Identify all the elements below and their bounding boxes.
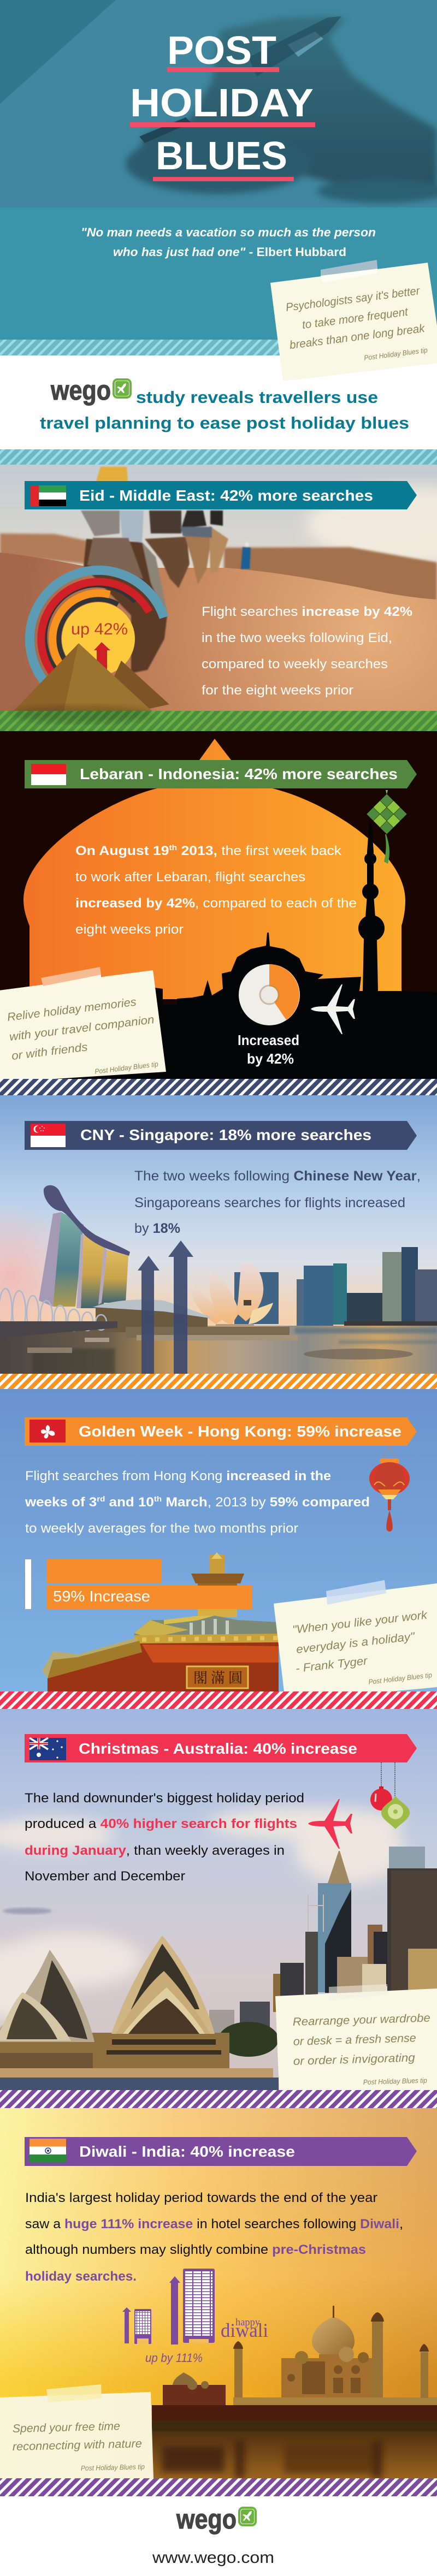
stripes: orange <box>0 1374 437 1389</box>
wego logo: wego <box>50 375 111 406</box>
Sydney Opera House <box>0 1936 279 2090</box>
note: wardrobe tip: or order is invigorating <box>293 2051 415 2068</box>
mosque building <box>163 2372 226 2407</box>
banner: Eid: Eid - Middle East: 42% more searches <box>79 487 373 504</box>
body text: Lebaran: to work after Lebaran, flight searches <box>75 870 305 885</box>
chart: pie 42%: Increased <box>238 1032 299 1048</box>
body text: Christmas: produced a 40% higher search for flights <box>25 1817 297 1831</box>
chart: arcs up 42% with pyramids <box>14 570 169 711</box>
note: Frank Tyger quote: everyday is a holiday" <box>296 1630 416 1656</box>
text: happy diwali: happy <box>235 2317 260 2328</box>
body text: Diwali <box>25 2191 403 2284</box>
body text: CNY: The two weeks following Chinese New Year , <box>134 1168 421 1184</box>
flag: Singapore <box>31 1124 66 1147</box>
note: psychologists tip: Psychologists say it's better <box>285 284 421 314</box>
Marina Bay Sands <box>39 1185 130 1308</box>
body text: Lebaran: th <box>169 843 177 852</box>
note: nature tip <box>0 2384 153 2478</box>
arrows: rising <box>138 1240 193 1374</box>
note: nature tip: Post Holiday Blues tip <box>81 2462 145 2472</box>
icon: ketupat <box>367 790 407 864</box>
bar chart: 59% increase <box>25 1559 252 1609</box>
chart: pie 42% <box>238 964 300 1067</box>
body text: Lebaran: On August 19 <box>75 843 217 858</box>
note: relive memories tip: or with friends <box>11 1041 88 1063</box>
panel: quote band <box>0 207 437 340</box>
note: nature tip: Spend your free time <box>13 2420 120 2435</box>
title: HOLIDAY <box>130 81 314 125</box>
Taj Mahal <box>233 2306 437 2405</box>
Sydney towers <box>209 1847 437 2057</box>
panel: Eid Middle East <box>0 465 437 711</box>
note: relive memories tip <box>0 967 166 1079</box>
panel: Diwali India <box>0 2108 437 2478</box>
body text: Diwali: holiday searches. <box>25 2269 137 2284</box>
body text: Christmas: The land downunder's biggest holiday period <box>25 1791 304 1806</box>
body text: CNY: by 18% <box>134 1221 180 1236</box>
stripes: purple lower <box>0 2478 437 2496</box>
note: Frank Tyger quote: Post Holiday Blues tip <box>368 1671 433 1686</box>
note: relive memories tip: Relive holiday memories <box>7 995 137 1024</box>
body text: Christmas: November and December <box>25 1869 185 1884</box>
website url: www.wego.com <box>152 2549 274 2567</box>
note: Frank Tyger quote: "When you like your work <box>292 1608 429 1636</box>
panel: hero header <box>0 0 437 207</box>
body text: Lebaran: the first week back <box>221 844 329 858</box>
banner: CNY: CNY - Singapore: 18% more searches <box>80 1126 371 1143</box>
title: BLUES <box>156 134 287 178</box>
banner: Golden Week <box>25 1417 417 1446</box>
shape: orange dome <box>23 739 405 999</box>
icon: white plane <box>311 984 355 1034</box>
note: relive memories tip: with your travel companion <box>9 1013 155 1043</box>
quote text: "No man needs a vacation so much as the person <box>81 225 376 239</box>
body text: CNY <box>134 1168 421 1236</box>
banner: Lebaran <box>25 760 417 788</box>
banner: Eid <box>25 481 417 509</box>
text: happy diwali: diwali <box>221 2319 268 2341</box>
note: wardrobe tip <box>275 1984 437 2090</box>
body text: Hong Kong: March <box>162 1495 208 1510</box>
body text: Hong Kong: weeks of 3 <box>25 1494 208 1510</box>
note: psychologists tip: breaks than one long break <box>289 322 426 352</box>
quote text <box>81 225 376 259</box>
body text: Diwali: saw a huge 111% increase in hotel searches following Diwali, <box>25 2217 403 2231</box>
body text: Lebaran: eight weeks prior <box>75 922 184 937</box>
photo: Marina Bay skyline <box>0 1095 437 1374</box>
icon: baubles <box>370 1762 410 1829</box>
stripes: teal lower <box>0 449 437 465</box>
flag: Hong Kong <box>29 1420 66 1443</box>
body text: CNY: Singaporeans searches for flights increased <box>134 1195 405 1210</box>
icon: lantern <box>369 1447 410 1532</box>
note: wardrobe tip: or desk = a fresh sense <box>293 2032 416 2048</box>
panel: CNY Singapore <box>0 1095 437 1374</box>
flag: India <box>29 2139 66 2162</box>
banner: Golden Week: Golden Week - Hong Kong: 59% increase <box>79 1423 401 1440</box>
note: psychologists tip: Post Holiday Blues tip <box>363 346 428 362</box>
body text: Hong Kong: Flight searches from Hong Kong increased in the <box>25 1469 331 1483</box>
title <box>130 29 315 181</box>
chart: hotels up by 111% <box>122 2269 215 2365</box>
panel: study headline <box>0 355 437 449</box>
note: psychologists tip <box>270 260 437 381</box>
note: wardrobe tip: Post Holiday Blues tip <box>363 2076 427 2086</box>
Helix bridge and mall <box>0 1289 298 1353</box>
title: POST <box>167 29 276 73</box>
icon: red plane <box>308 1799 352 1849</box>
banner: Diwali: Diwali - India: 40% increase <box>79 2143 295 2160</box>
body text: Lebaran <box>75 843 357 937</box>
body text: Hong Kong: rd <box>97 1494 105 1503</box>
flag: Australia <box>29 1738 66 1760</box>
photo: Sydney harbour <box>0 1709 437 2090</box>
silhouette: skyline and minaret <box>0 822 437 1079</box>
photo: temple roof: 閣滿圓 <box>193 1670 243 1686</box>
ArtScience Museum <box>191 1262 273 1331</box>
photo: Taj Mahal sunset <box>0 2108 437 2478</box>
stripes: navy <box>0 1079 437 1095</box>
banner: Diwali <box>25 2137 417 2166</box>
quote text: who has just had one" - Elbert Hubbard <box>113 245 346 259</box>
note: nature tip: reconnecting with nature <box>13 2437 142 2453</box>
body text: Hong Kong: , 2013 by 59% compared <box>208 1495 362 1510</box>
stripes: red <box>0 1691 437 1709</box>
stripes: purple upper <box>0 2090 437 2108</box>
note: Frank Tyger quote: - Frank Tyger <box>295 1654 369 1675</box>
headline text <box>40 388 409 432</box>
headline text: study reveals travellers use <box>136 388 378 407</box>
chart: arcs up 42% with pyramids: up 42% <box>71 620 128 638</box>
banner: Christmas <box>25 1734 417 1762</box>
wego logo footer: wego <box>176 2504 237 2535</box>
banner: CNY <box>25 1121 417 1150</box>
panel: Golden Week Hong Kong <box>0 1389 437 1691</box>
body text: Eid: Flight searches increase by 42% <box>202 604 412 619</box>
arrow: up <box>94 642 110 680</box>
body text: Diwali: although numbers may slightly combine pre-Christmas <box>25 2242 366 2257</box>
note: psychologists tip: to take more frequent <box>302 306 409 331</box>
body text: Christmas: during January , than weekly averages in <box>25 1843 285 1858</box>
body text: Hong Kong: and 10 <box>105 1495 154 1510</box>
flag: Indonesia <box>31 764 66 785</box>
stripes: teal upper <box>0 340 437 355</box>
note: wardrobe tip: Rearrange your wardrobe <box>292 2012 430 2028</box>
body text: Eid: in the two weeks following Eid, <box>202 631 392 645</box>
body text: Hong Kong <box>25 1469 370 1536</box>
headline text: travel planning to ease post holiday blues <box>40 413 409 432</box>
note: Frank Tyger quote <box>274 1580 437 1691</box>
panel: Lebaran Indonesia <box>0 731 437 1079</box>
body text: Hong Kong: th <box>154 1494 162 1503</box>
panel: Christmas Australia <box>0 1709 437 2090</box>
body text: Eid: compared to weekly searches <box>202 657 388 672</box>
body text: Hong Kong: to weekly averages for the two months prior <box>25 1521 298 1536</box>
photo: temple roof <box>42 1552 279 1691</box>
flag: UAE <box>30 485 66 506</box>
body text: Diwali: India's largest holiday period towards the end of the year <box>25 2191 377 2205</box>
chart: pie 42%: by 42% <box>247 1050 294 1067</box>
panel: footer <box>0 2496 437 2576</box>
note: relive memories tip: Post Holiday Blues tip <box>95 1060 159 1076</box>
stripes: green <box>0 711 437 731</box>
chart: hotels up by 111%: up by 111% <box>145 2351 203 2365</box>
photo: desert camels <box>0 465 437 711</box>
body text: Eid: for the eight weeks prior <box>202 683 353 698</box>
banner: Lebaran: Lebaran - Indonesia: 42% more searches <box>80 765 398 782</box>
body text: Lebaran: 2013, <box>177 844 217 858</box>
body text: Christmas <box>25 1791 304 1884</box>
body text: Eid <box>202 604 412 698</box>
body text: Lebaran: increased by 42% , compared to each of the <box>75 896 357 911</box>
banner: Christmas: Christmas - Australia: 40% increase <box>79 1740 357 1757</box>
bar chart: 59% increase: 59% Increase <box>53 1588 150 1605</box>
